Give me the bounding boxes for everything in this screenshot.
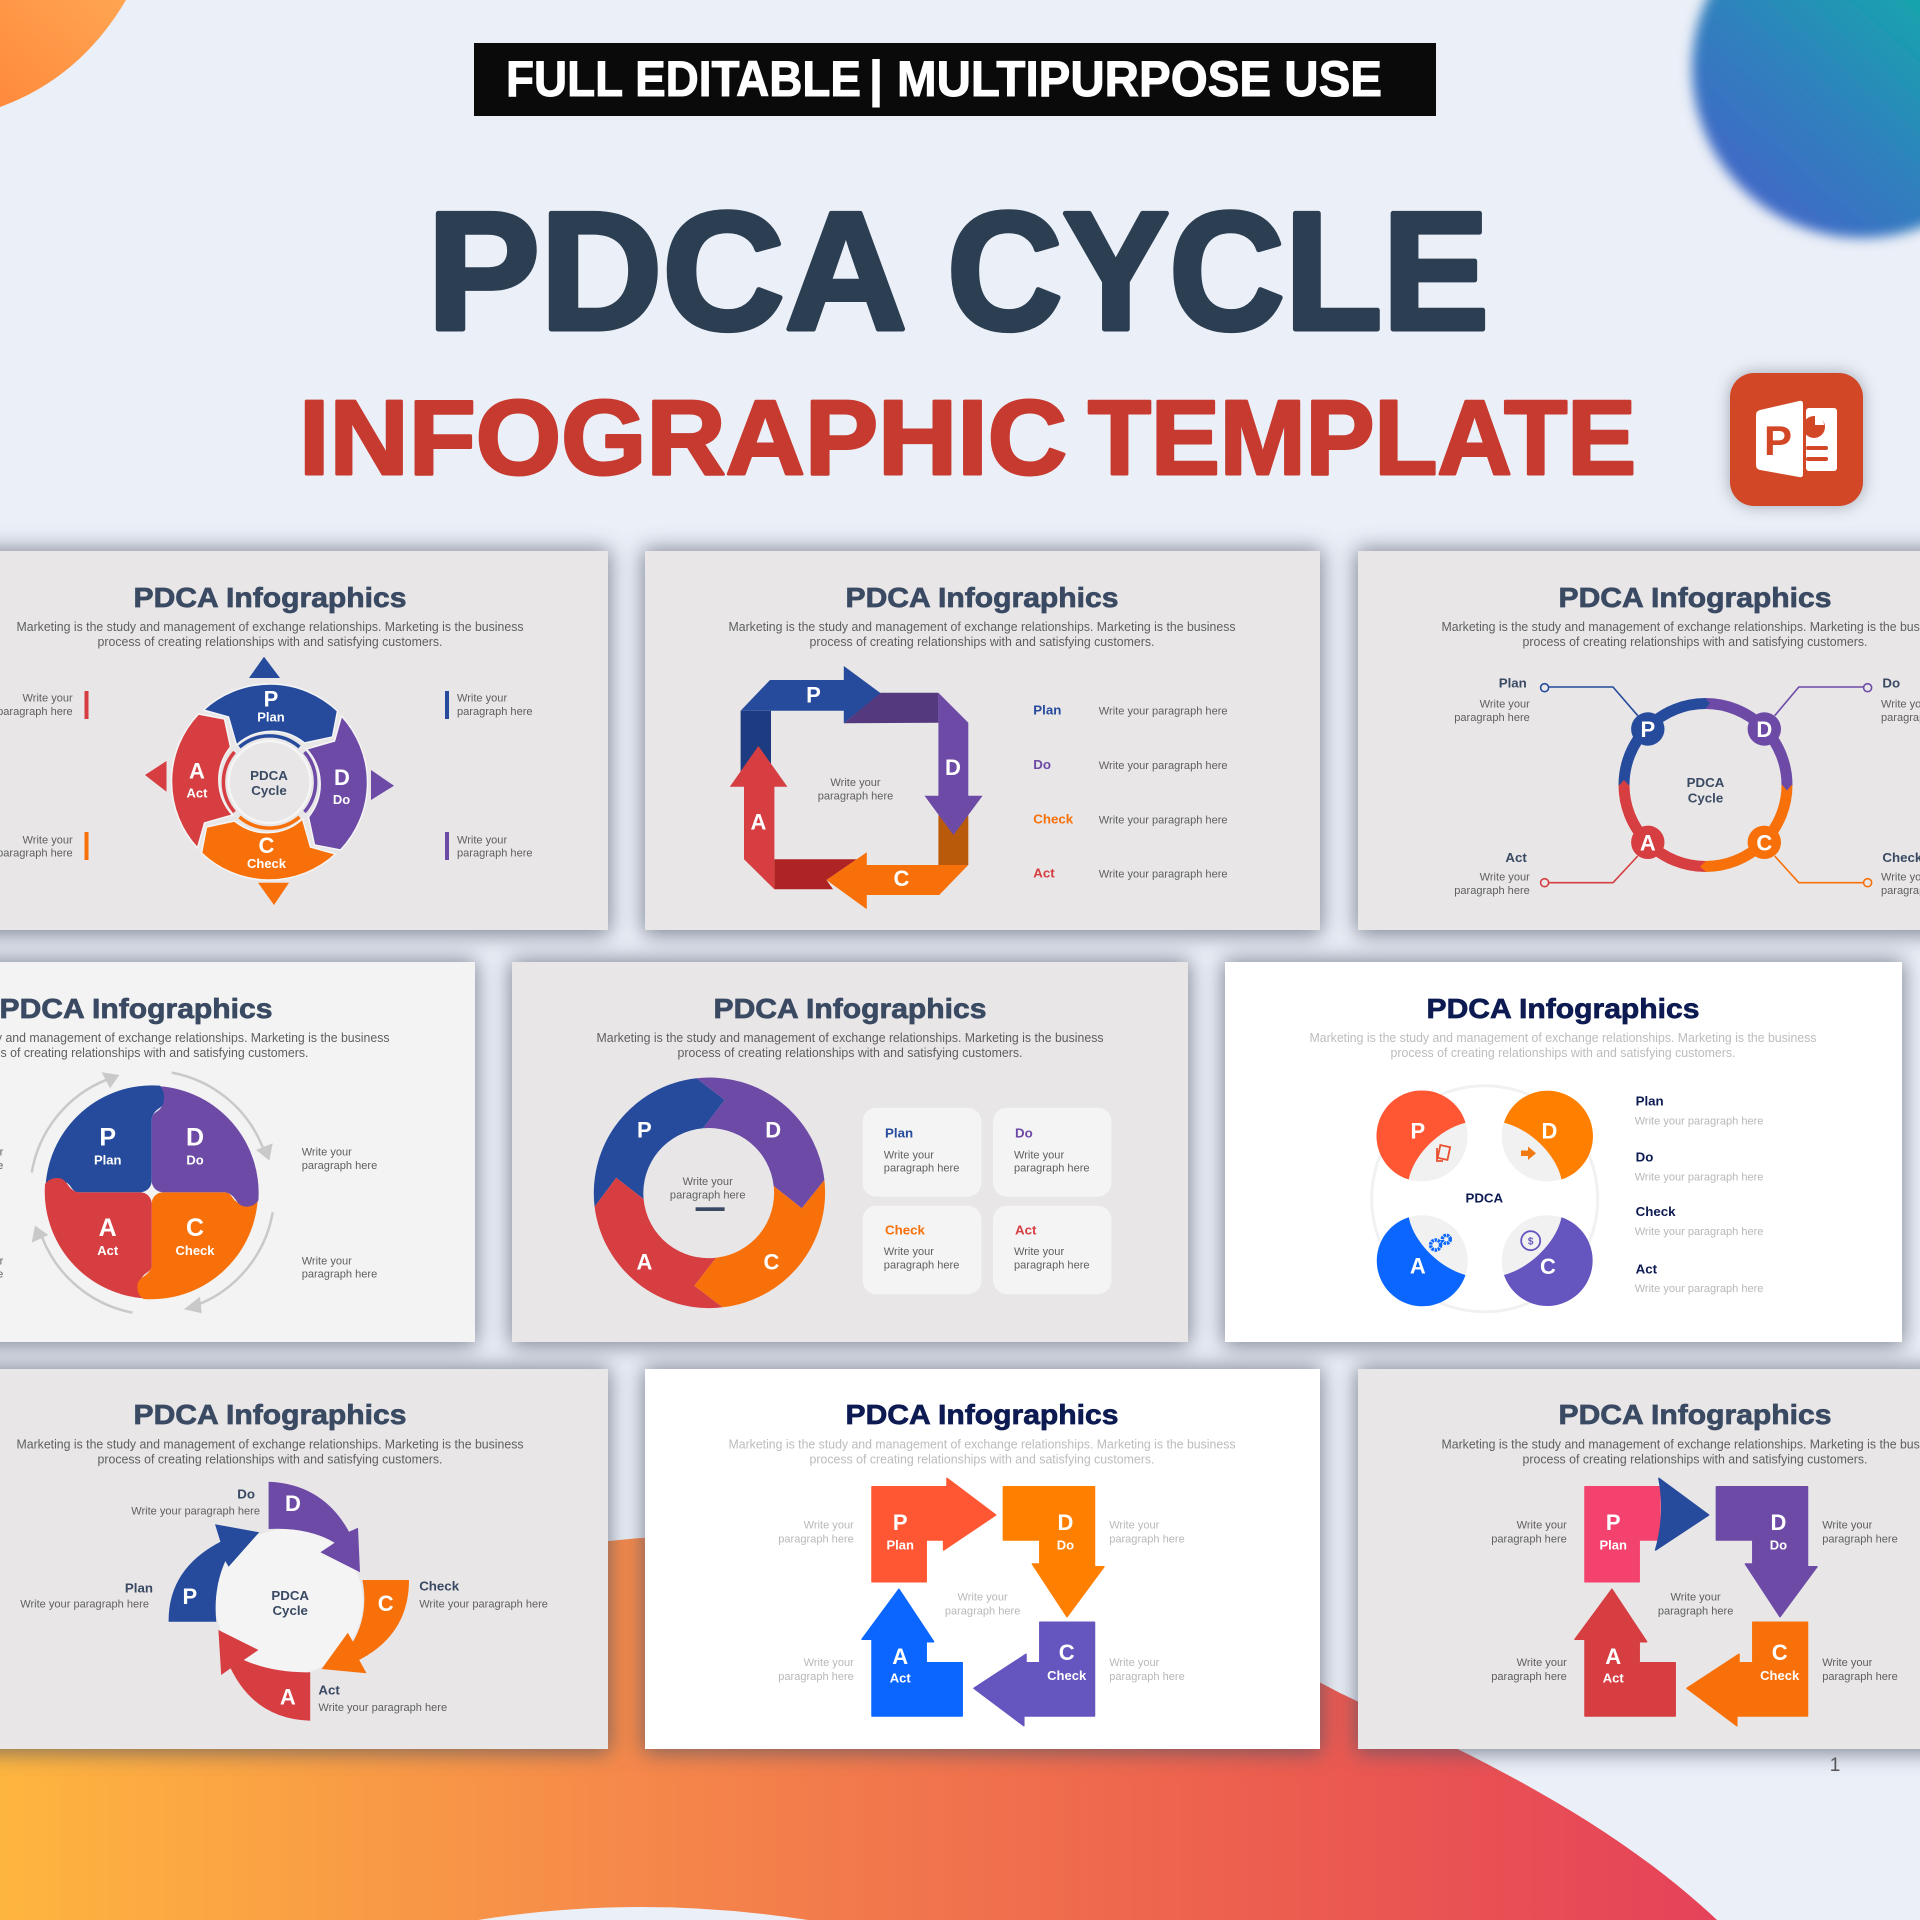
- icon: PowerPoint logo: [1730, 373, 1863, 506]
- arrow labels: Do: [237, 1486, 255, 1501]
- slide description: process of creating relationships with and satisfying customers.: [1522, 1452, 1868, 1466]
- ring diagram: C: [1756, 830, 1772, 856]
- background shape: top-right blue gradient circle: [1692, 0, 1920, 238]
- slide description: Marketing is the study and management of exchange relationships. Marketing is the business: [16, 620, 524, 634]
- four circle diagram: PDCA: [1465, 1190, 1504, 1205]
- slide description: process of creating relationships with and satisfying customers.: [810, 1452, 1154, 1466]
- corner arrow cycle: Act: [1603, 1671, 1624, 1686]
- corner arrow cycle: Act: [890, 1671, 911, 1686]
- slide description: [1442, 620, 1920, 649]
- ring diagram: D: [1756, 717, 1772, 742]
- card: check: [862, 1206, 982, 1294]
- radial diagram: [145, 657, 394, 905]
- card: act: paragraph here: [1014, 1259, 1090, 1271]
- slide description: Marketing is the study and management of exchange relationships. Marketing is the business: [728, 1438, 1236, 1452]
- radial diagram: Plan: [257, 710, 285, 725]
- connector labels: Write your: [1480, 699, 1530, 711]
- radial diagram: PDCA: [250, 768, 288, 783]
- square arrow cycle: P: [806, 682, 821, 707]
- legend list: [1033, 702, 1228, 881]
- main title: CYCLE: [947, 177, 1489, 365]
- slide description: Marketing is the study and management of exchange relationships. Marketing is the business: [1310, 1031, 1816, 1045]
- radial diagram: Check: [247, 856, 287, 871]
- ring diagram: P: [1640, 717, 1655, 742]
- notes: paragraph here: [1658, 1605, 1733, 1617]
- card: act: Write your: [1014, 1246, 1064, 1258]
- centre note: Write your: [830, 777, 881, 789]
- donut chart: D: [765, 1118, 781, 1143]
- centre note: [818, 777, 893, 802]
- radial diagram: Do: [333, 792, 350, 807]
- corner arrow cycle: Check: [1760, 1668, 1800, 1683]
- legend list: [1635, 1094, 1763, 1295]
- corner arrow cycle: D: [1057, 1510, 1073, 1535]
- curved arrow cycle: A: [280, 1684, 296, 1709]
- arrow labels: [20, 1486, 548, 1714]
- corner arrow cycle: P: [1606, 1510, 1621, 1535]
- slide description: [0, 1031, 390, 1060]
- donut chart: paragraph here: [670, 1189, 745, 1201]
- card: plan: [862, 1108, 982, 1197]
- background shape: top-left orange corner: [0, 0, 126, 107]
- side notes: Write your: [23, 693, 73, 705]
- arrow labels: Write your paragraph here: [318, 1702, 447, 1714]
- panel: slide 1 radial segments: [0, 551, 608, 930]
- subtitle: TEMPLATE: [1088, 379, 1636, 497]
- panel: slide 3 ring with connectors: [1358, 551, 1920, 930]
- slide description: [16, 620, 524, 649]
- legend list: Do: [1033, 757, 1051, 772]
- corner arrow cycle: Do: [1057, 1537, 1074, 1552]
- radial diagram: A: [189, 759, 205, 784]
- legend list: Write your paragraph here: [1635, 1115, 1763, 1127]
- notes: paragraph here: [945, 1605, 1020, 1617]
- corner arrow cycle: [1575, 1478, 1817, 1726]
- square arrow cycle: A: [750, 809, 766, 834]
- main title: PDCA: [427, 177, 907, 365]
- square arrow cycle: [730, 666, 983, 909]
- curved arrow cycle: D: [285, 1491, 301, 1516]
- notes: paragraph here: [1491, 1671, 1567, 1683]
- slide description: [1310, 1031, 1816, 1060]
- radial diagram: D: [334, 765, 350, 790]
- puzzle circle: [32, 1072, 273, 1313]
- notes: Write your: [1822, 1519, 1873, 1531]
- puzzle circle: Do: [186, 1152, 204, 1167]
- side notes: Write your: [302, 1255, 352, 1267]
- notes: paragraph here: [778, 1533, 854, 1545]
- notes: paragraph here: [778, 1671, 854, 1683]
- side notes: Write your: [302, 1147, 352, 1159]
- curved arrow cycle: C: [378, 1591, 394, 1616]
- slide description: [728, 1438, 1236, 1466]
- card: check: Write your: [884, 1246, 934, 1258]
- corner arrow cycle: Plan: [886, 1537, 914, 1552]
- puzzle circle: D: [186, 1124, 204, 1152]
- slide description: [1442, 1438, 1920, 1466]
- corner arrow cycle: Check: [1047, 1668, 1087, 1683]
- side notes: paragraph here: [302, 1269, 377, 1281]
- square arrow cycle: D: [945, 755, 961, 780]
- arrow labels: Plan: [125, 1580, 153, 1595]
- panel: slide 4 puzzle circle: [0, 962, 475, 1342]
- legend list: Write your paragraph here: [1635, 1283, 1763, 1295]
- notes: Write your: [1822, 1657, 1873, 1669]
- panel: slide 9 corner arrows grey: [1358, 1369, 1920, 1749]
- legend list: Plan: [1033, 702, 1061, 717]
- slide description: [16, 1438, 524, 1466]
- top banner: [474, 43, 1436, 116]
- card: do: Write your: [1014, 1149, 1064, 1161]
- curved arrow cycle: [169, 1482, 409, 1721]
- notes: paragraph here: [1109, 1533, 1185, 1545]
- side notes: Write your: [457, 834, 507, 846]
- slide description: process of creating relationships with and satisfying customers.: [1390, 1046, 1736, 1060]
- card: act: [993, 1206, 1112, 1294]
- page number: 1: [1830, 1755, 1840, 1776]
- side notes: paragraph here: [457, 848, 533, 860]
- corner arrow cycle: A: [892, 1644, 908, 1669]
- slide description: [728, 620, 1236, 649]
- main title: [427, 177, 1489, 365]
- connector labels: Plan: [1499, 676, 1527, 691]
- connector labels: paragraph here: [1454, 885, 1530, 897]
- background shape: bottom pale curve: [478, 1907, 808, 1920]
- puzzle circle: Plan: [94, 1152, 121, 1167]
- notes: [1491, 1519, 1898, 1683]
- icon: arrow: [1521, 1146, 1536, 1160]
- top banner: |: [869, 51, 883, 108]
- curved arrow cycle: P: [182, 1584, 197, 1609]
- four circle diagram: C: [1540, 1254, 1556, 1279]
- icon: gears: [1431, 1235, 1450, 1250]
- card: act: Act: [1015, 1222, 1037, 1237]
- connector labels: [1454, 676, 1920, 897]
- legend list: Write your paragraph here: [1099, 869, 1228, 881]
- slide description: Marketing is the study and management of exchange relationships. Marketing is the business: [16, 1438, 524, 1452]
- corner arrow cycle: Plan: [1599, 1537, 1627, 1552]
- notes: Write your: [958, 1592, 1008, 1604]
- slide heading: PDCA Infographics: [846, 1399, 1118, 1430]
- subtitle: [299, 379, 1636, 497]
- curved arrow cycle: PDCA: [271, 1588, 309, 1603]
- side notes: Write your: [23, 834, 73, 846]
- side notes: [0, 691, 533, 860]
- slide heading: PDCA Infographics: [134, 1399, 406, 1430]
- slide heading: PDCA Infographics: [846, 582, 1118, 613]
- notes: Write your: [804, 1657, 854, 1669]
- legend list: Write your paragraph here: [1099, 814, 1228, 826]
- puzzle circle: A: [99, 1214, 117, 1242]
- notes: paragraph here: [1491, 1533, 1567, 1545]
- slide description: [596, 1031, 1104, 1060]
- icon: clipboard: [1437, 1145, 1450, 1161]
- slide heading: PDCA Infographics: [1558, 582, 1832, 613]
- side notes: Write your: [457, 693, 507, 705]
- icon: PowerPoint logo: P: [1764, 417, 1792, 464]
- connector labels: Act: [1505, 850, 1527, 865]
- arrow labels: Act: [318, 1682, 340, 1697]
- corner arrow cycle: D: [1770, 1510, 1786, 1535]
- four circle diagram: A: [1410, 1253, 1426, 1278]
- ring diagram: [1541, 684, 1872, 887]
- slide description: process of creating relationships with and satisfying customers.: [98, 635, 442, 649]
- slide heading: PDCA Infographics: [0, 993, 272, 1024]
- background shape: bottom gradient wave: [0, 1537, 1717, 1920]
- card: plan: Plan: [885, 1126, 913, 1141]
- curved arrow cycle: Cycle: [272, 1603, 308, 1618]
- legend list: Act: [1033, 866, 1055, 881]
- legend list: Check: [1033, 811, 1074, 826]
- side notes: paragraph here: [457, 706, 533, 718]
- four circle diagram: P: [1410, 1118, 1425, 1143]
- slide description: process of creating relationships with and satisfying customers.: [810, 635, 1154, 649]
- panel: slide 8 corner arrows white: [645, 1369, 1320, 1749]
- top banner: MULTIPURPOSE USE: [897, 51, 1382, 107]
- legend list: Write your paragraph here: [1099, 760, 1228, 772]
- slide heading: PDCA Infographics: [134, 582, 406, 613]
- notes: paragraph here: [1109, 1671, 1185, 1683]
- legend list: Plan: [1636, 1094, 1664, 1109]
- radial diagram: Cycle: [251, 783, 287, 798]
- connector labels: paragraph here: [1454, 712, 1530, 724]
- legend list: Write your paragraph here: [1635, 1226, 1763, 1238]
- corner arrow cycle: C: [1772, 1640, 1788, 1665]
- subtitle: INFOGRAPHIC: [299, 379, 1067, 497]
- notes: [778, 1519, 1185, 1683]
- puzzle circle: C: [186, 1214, 204, 1242]
- corner arrow cycle: Do: [1770, 1537, 1787, 1552]
- slide heading: PDCA Infographics: [1426, 993, 1700, 1024]
- side notes: paragraph here: [302, 1160, 377, 1172]
- slide heading: PDCA Infographics: [714, 993, 986, 1024]
- card: check: paragraph here: [884, 1259, 959, 1271]
- slide description: Marketing is the study and management of exchange relationships. Marketing is the business: [596, 1031, 1104, 1045]
- legend list: Check: [1636, 1204, 1676, 1219]
- connector labels: Write your: [1480, 872, 1530, 884]
- notes: Write your: [1517, 1519, 1567, 1531]
- legend list: Write your paragraph here: [1635, 1172, 1763, 1184]
- panel: slide 2 square arrows: [645, 551, 1320, 930]
- notes: Write your: [1109, 1657, 1160, 1669]
- ring diagram: PDCA: [1687, 775, 1725, 790]
- donut chart: [594, 1078, 825, 1308]
- radial diagram: Act: [187, 786, 208, 801]
- panel: slide 5 donut and cards: [512, 962, 1188, 1342]
- puzzle circle: P: [99, 1124, 116, 1152]
- arrow labels: Write your paragraph here: [20, 1598, 149, 1610]
- donut chart: P: [637, 1118, 652, 1143]
- four circle diagram: D: [1542, 1118, 1557, 1143]
- slide shadows: [0, 549, 1920, 1753]
- slide description: Marketing is the study and management of exchange relationships. Marketing is the business: [728, 620, 1236, 634]
- corner arrow cycle: A: [1605, 1644, 1621, 1669]
- slide description: process of creating relationships with and satisfying customers.: [678, 1046, 1022, 1060]
- arrow labels: Write your paragraph here: [131, 1505, 260, 1517]
- square arrow cycle: C: [894, 866, 910, 891]
- side notes: [0, 1147, 377, 1281]
- notes: Write your: [1109, 1519, 1160, 1531]
- slide heading: PDCA Infographics: [1558, 1399, 1832, 1430]
- card: do: Do: [1015, 1126, 1033, 1141]
- icon: coin: [1521, 1231, 1540, 1250]
- notes: Write your: [804, 1519, 854, 1531]
- ring diagram: Cycle: [1688, 790, 1723, 805]
- card: plan: paragraph here: [884, 1163, 959, 1175]
- card: do: paragraph here: [1014, 1163, 1090, 1175]
- donut chart: Write your: [683, 1176, 733, 1188]
- puzzle circle: Act: [97, 1243, 119, 1258]
- centre note: paragraph here: [818, 790, 893, 802]
- card: check: Check: [885, 1222, 926, 1237]
- icon: coin: $: [1528, 1236, 1534, 1248]
- ring diagram: A: [1640, 830, 1656, 856]
- legend list: Do: [1636, 1150, 1653, 1165]
- notes: Write your: [1671, 1592, 1721, 1604]
- radial diagram: C: [259, 833, 275, 858]
- card: plan: Write your: [884, 1149, 934, 1161]
- arrow labels: Write your paragraph here: [419, 1598, 548, 1610]
- slide description: process of creating relationships with and satisfying customers.: [98, 1452, 442, 1466]
- top banner: FULL EDITABLE: [506, 51, 861, 107]
- grey cycle arrows: [32, 1072, 273, 1313]
- donut chart: A: [636, 1249, 652, 1274]
- corner arrow cycle: [862, 1478, 1104, 1726]
- arrow labels: Check: [419, 1579, 460, 1594]
- card: do: [993, 1108, 1112, 1197]
- notes: paragraph here: [1822, 1671, 1898, 1683]
- four circle diagram: [1372, 1086, 1598, 1312]
- panel: slide 6 four circles: [1225, 962, 1902, 1342]
- donut chart: C: [764, 1249, 780, 1274]
- legend list: Act: [1636, 1261, 1658, 1276]
- slide description: process of creating relationships with and satisfying customers.: [1522, 635, 1868, 649]
- legend list: Write your paragraph here: [1099, 705, 1228, 717]
- notes: Write your: [1517, 1657, 1567, 1669]
- radial diagram: P: [264, 687, 278, 712]
- puzzle circle: Check: [175, 1243, 215, 1258]
- notes: paragraph here: [1822, 1533, 1898, 1545]
- corner arrow cycle: P: [893, 1510, 908, 1535]
- corner arrow cycle: C: [1059, 1640, 1075, 1665]
- panel: slide 7 curved arrows: [0, 1369, 608, 1749]
- connector labels: Do: [1882, 676, 1900, 691]
